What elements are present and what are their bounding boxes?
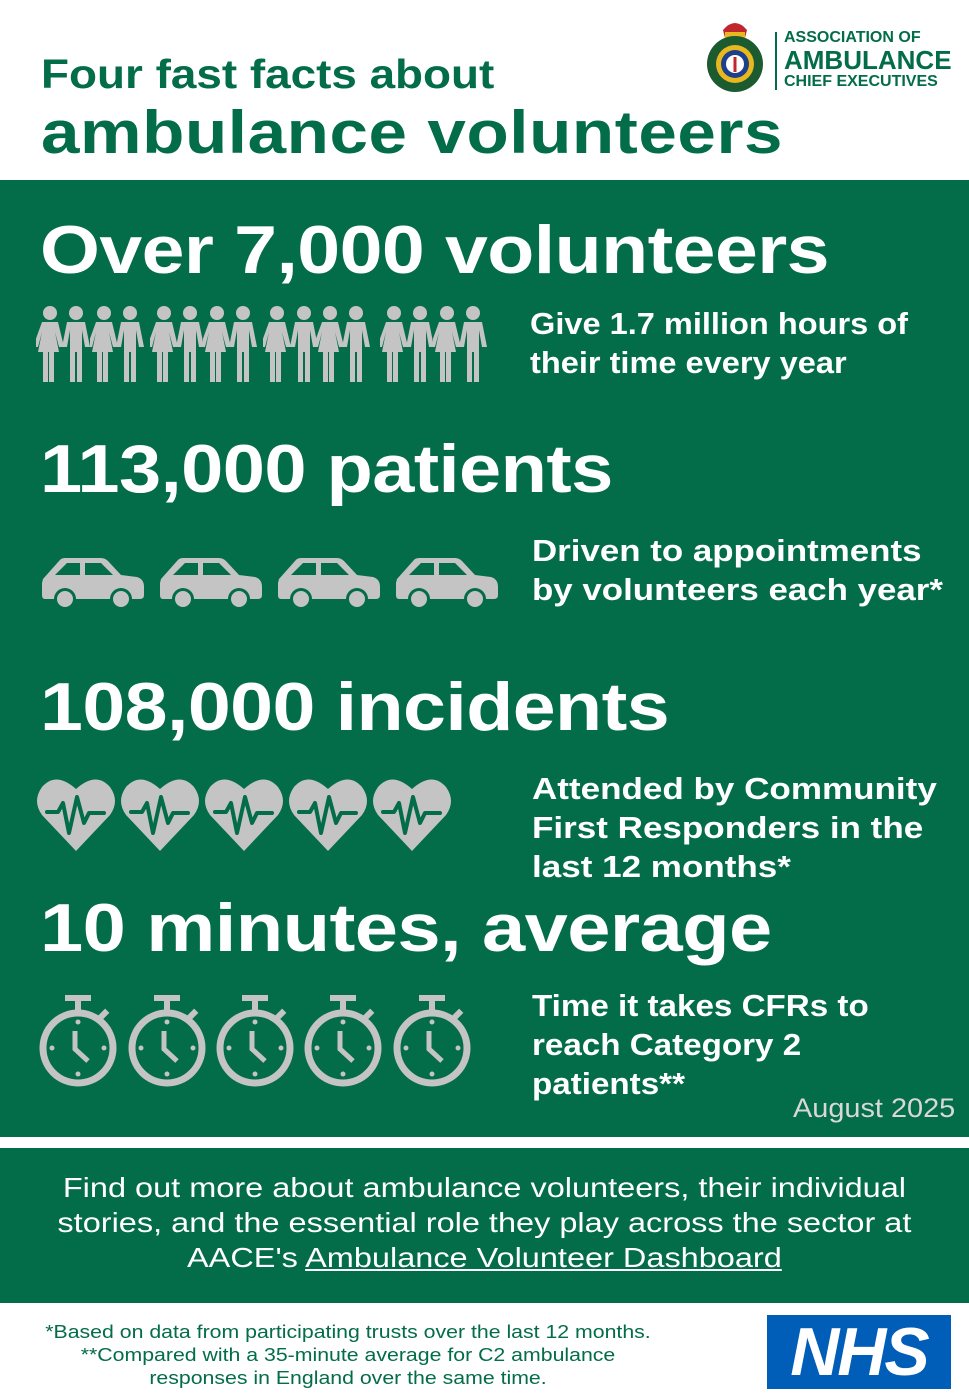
- title: ambulance volunteers: [41, 99, 783, 166]
- heading: patients: 113,000 patients: [40, 431, 613, 507]
- logo: AACE: ASSOCIATION OF: [784, 29, 921, 46]
- title: Four fast facts about: [41, 51, 494, 97]
- heading: volunteers: Over 7,000 volunteers: [40, 212, 829, 288]
- text: attended: Attended by Community: [532, 771, 937, 806]
- icon: stopwatches row: [40, 995, 470, 1086]
- panel: find out more: AACE's Ambulance Volunteer Dashboard: [187, 1242, 782, 1273]
- date: August 2025: [793, 1093, 955, 1123]
- text: attended: First Responders in the: [532, 810, 923, 845]
- text: attended: last 12 months*: [532, 849, 791, 884]
- text: attended: [532, 771, 937, 884]
- footnotes: [45, 1321, 651, 1388]
- footnotes: *Based on data from participating trusts over the last 12 months.: [45, 1321, 651, 1342]
- icon: hearts row: [37, 780, 451, 851]
- footnotes: **Compared with a 35-minute average for C2 ambulance: [81, 1344, 615, 1365]
- text: time: [532, 988, 869, 1101]
- text: hours: Give 1.7 million hours of: [530, 306, 908, 341]
- text: time: Time it takes CFRs to: [532, 988, 869, 1023]
- text: time: patients**: [532, 1066, 685, 1101]
- text: hours: [530, 306, 908, 380]
- footnotes: responses in England over the same time.: [149, 1367, 547, 1388]
- text: driven: [532, 533, 943, 607]
- panel: find out more: Find out more about ambulance volunteers, their individual: [63, 1172, 906, 1203]
- logo: AACE: [707, 23, 952, 92]
- icon: cars row: [42, 558, 498, 607]
- logo: AACE: AMBULANCE: [784, 45, 952, 75]
- panel: find out more: stories, and the essential role they play across the sector at: [57, 1207, 911, 1238]
- text: hours: their time every year: [530, 345, 847, 380]
- title: [41, 51, 783, 166]
- text: driven: Driven to appointments: [532, 533, 921, 568]
- panel: find out more: [0, 1148, 969, 1303]
- icon: people row: [36, 306, 487, 382]
- panel: facts: [0, 180, 969, 1137]
- logo: NHS: NHS: [790, 1314, 928, 1390]
- heading: incidents: 108,000 incidents: [40, 669, 669, 745]
- text: driven: by volunteers each year*: [532, 572, 943, 607]
- heading: minutes: 10 minutes, average: [40, 890, 772, 966]
- text: time: reach Category 2: [532, 1027, 801, 1062]
- logo: AACE: CHIEF EXECUTIVES: [784, 73, 938, 90]
